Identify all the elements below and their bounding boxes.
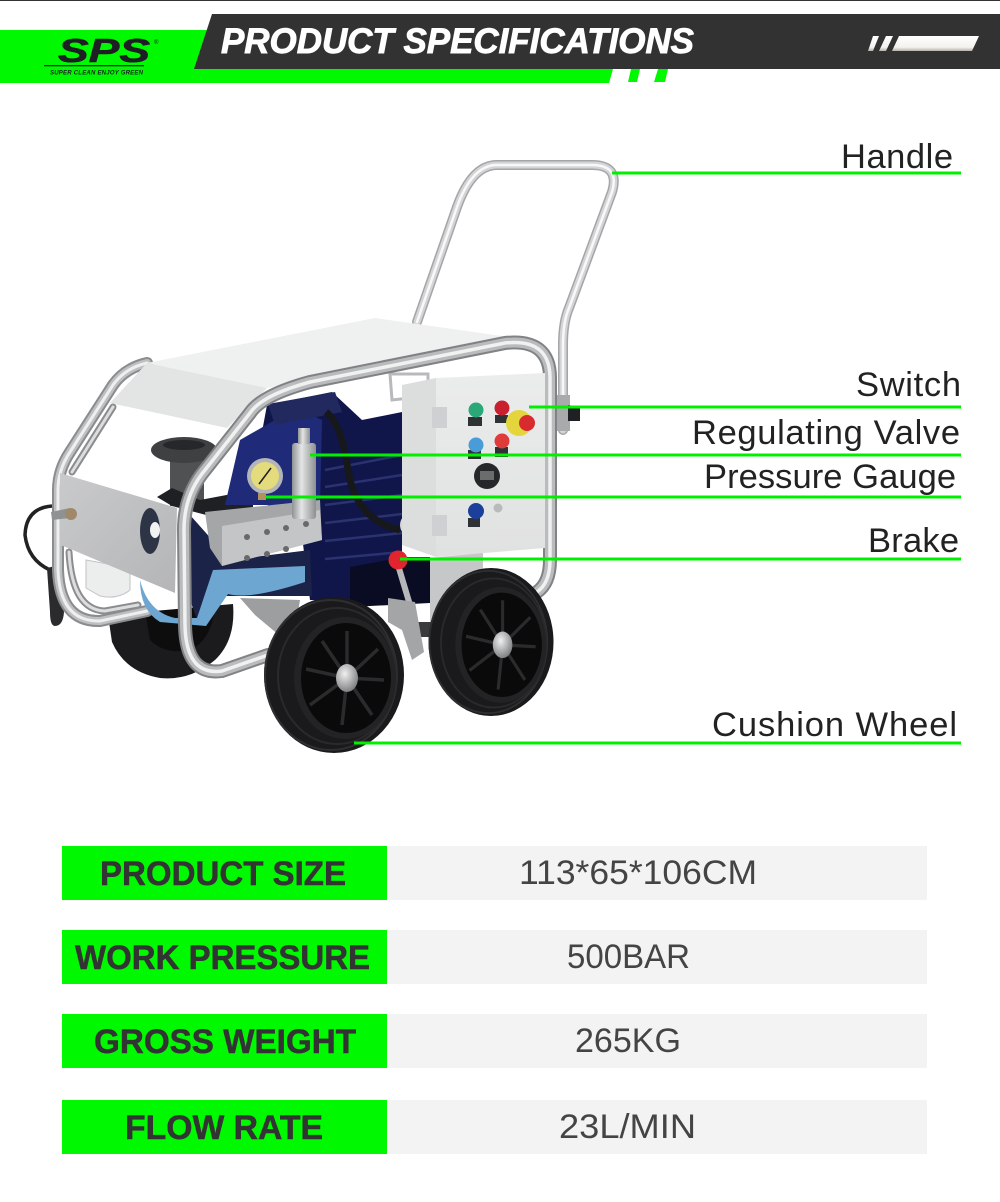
box side [402, 378, 436, 557]
leader line [612, 172, 961, 174]
box face [436, 373, 545, 557]
plate bolt [51, 508, 77, 520]
spec row: gross weight [62, 1014, 927, 1068]
value: 265KG [575, 1022, 681, 1060]
leader line [266, 496, 961, 498]
callout: Brake [400, 522, 961, 560]
plate opening [140, 508, 160, 554]
label: Regulating Valve [692, 414, 960, 452]
pump block [205, 500, 322, 566]
green button [468, 402, 484, 426]
green ribbon [0, 30, 613, 83]
hour meter [474, 463, 500, 489]
key cell [62, 846, 387, 900]
label: Brake [868, 522, 959, 560]
callout: Cushion Wheel [354, 706, 961, 744]
water tank cap [151, 437, 217, 506]
callout: Handle [612, 138, 961, 176]
value: 23L/MIN [559, 1108, 696, 1146]
key cell [62, 1100, 387, 1154]
front wheel [264, 597, 404, 753]
spec row: work pressure [62, 930, 927, 984]
small indicator [494, 504, 502, 512]
handle clamp [557, 395, 580, 431]
label: Switch [856, 366, 961, 404]
roof panel [110, 318, 530, 428]
key: WORK PRESSURE [75, 939, 370, 977]
axle [415, 622, 435, 637]
value background [389, 1100, 927, 1154]
leader line [400, 558, 961, 560]
dark title bar [194, 14, 1000, 69]
tagline: SUPER CLEAN ENJOY GREEN [50, 70, 144, 76]
key: PRODUCT SIZE [100, 855, 346, 893]
callout: Switch [529, 366, 961, 408]
leader line [354, 742, 961, 744]
top rule [0, 0, 1000, 1]
leader line [310, 454, 961, 456]
motor [225, 392, 402, 600]
registered mark: ® [154, 39, 159, 46]
box bracket [390, 374, 428, 400]
label: Handle [841, 138, 953, 176]
control box [402, 373, 545, 557]
under-box bracket [430, 553, 483, 630]
value: 113*65*106CM [519, 854, 757, 892]
dark blue button [468, 503, 484, 527]
blue button [468, 438, 484, 459]
rear handle cable [25, 506, 52, 570]
pump head ribs [157, 488, 253, 516]
cable gland [400, 515, 416, 535]
pressure gauge [247, 458, 283, 500]
red button [494, 400, 510, 423]
red button two [494, 434, 510, 457]
callout: Regulating Valve [310, 414, 961, 456]
under frame [240, 598, 300, 636]
title: PRODUCT SPECIFICATIONS [221, 22, 694, 61]
decorative bars icon [868, 36, 979, 51]
motor foot [350, 557, 430, 607]
shadow under pump [190, 515, 312, 622]
leader line [529, 406, 961, 408]
green stripes [628, 69, 668, 82]
rear right wheel [428, 568, 554, 716]
label: Pressure Gauge [704, 458, 956, 496]
logo mark: SPS [58, 32, 150, 69]
value background [389, 930, 927, 984]
value background [389, 846, 927, 900]
back wheel [108, 604, 233, 678]
handle tube [417, 165, 614, 430]
rear frame tube [58, 363, 147, 621]
motor cable [326, 412, 400, 530]
logo [44, 32, 159, 76]
brake lever [388, 550, 424, 660]
product illustration: pressure washer [25, 165, 614, 753]
key: GROSS WEIGHT [94, 1023, 356, 1061]
value: 500BAR [567, 938, 690, 976]
header banner [0, 14, 1000, 83]
key cell [62, 930, 387, 984]
key: FLOW RATE [125, 1109, 323, 1147]
filter [86, 560, 130, 597]
value background [389, 1014, 927, 1068]
spec row: flow rate [62, 1100, 927, 1154]
emergency stop [506, 410, 535, 436]
regulating valve [292, 428, 316, 519]
front frame tube [184, 342, 550, 671]
rear bracket [47, 566, 64, 626]
callout: Pressure Gauge [266, 458, 961, 498]
key cell [62, 1014, 387, 1068]
blue hose [140, 566, 305, 626]
label: Cushion Wheel [712, 706, 957, 744]
box hinges [432, 407, 447, 536]
spec row: product size [62, 846, 927, 900]
side plate [60, 473, 177, 593]
